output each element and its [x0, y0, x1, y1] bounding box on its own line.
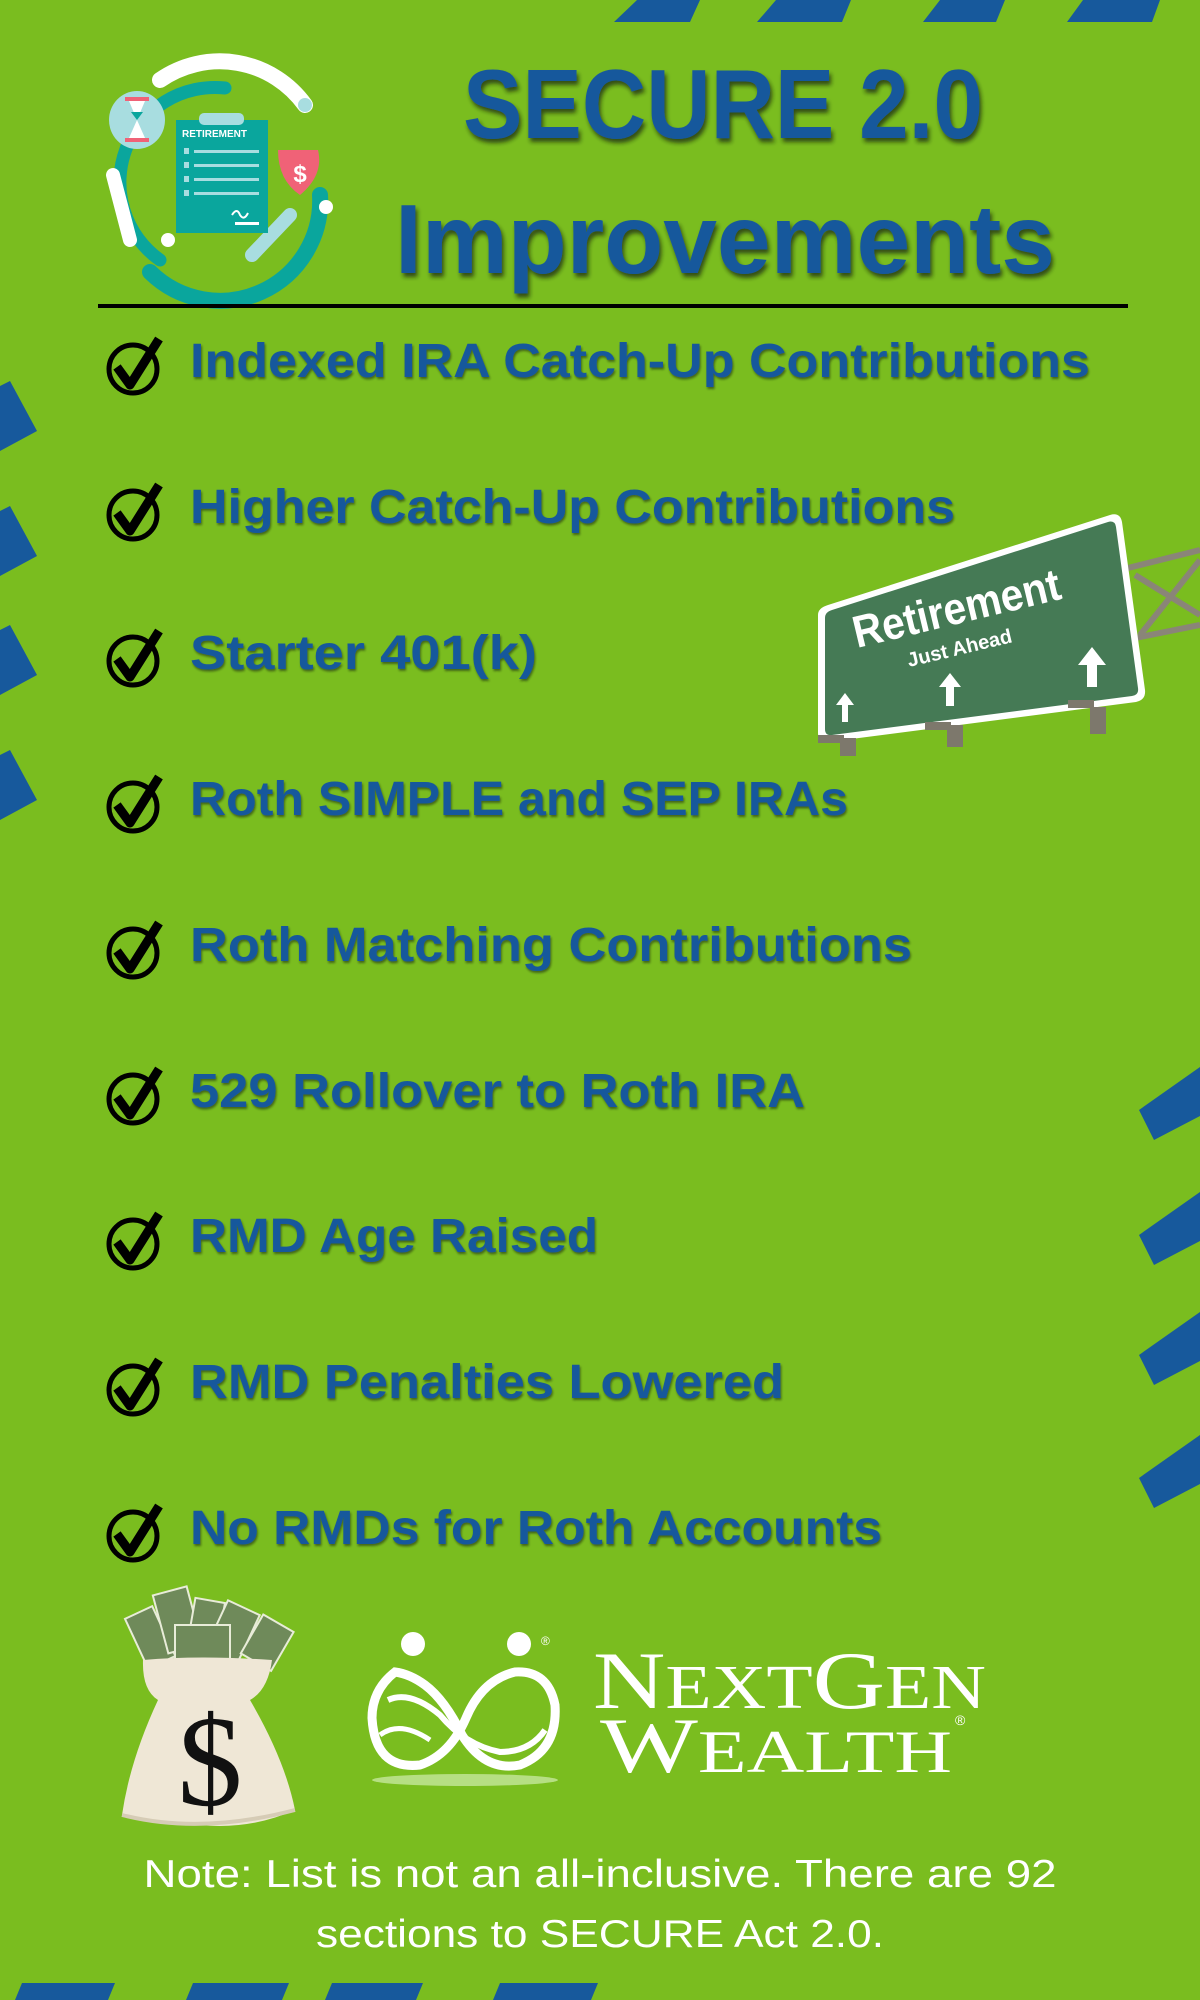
- item 8: RMD Penalties Lowered: [190, 1356, 784, 1409]
- note text: [144, 1853, 1056, 1956]
- bottom stripes: [15, 1983, 598, 2000]
- item 7: RMD Age Raised: [190, 1210, 598, 1263]
- note text: sections to SECURE Act 2.0.: [316, 1913, 884, 1956]
- logo symbol: ®: [541, 1634, 550, 1648]
- road sign: Retirement Just Ahead: Retirement: [847, 559, 1065, 658]
- right stripes: [1139, 1067, 1200, 1508]
- logo symbol: [372, 1632, 558, 1786]
- left stripes: [0, 381, 37, 820]
- icon: retirement clipboard: RETIREMENT: [182, 129, 247, 140]
- item 4: Roth SIMPLE and SEP IRAs: [190, 773, 848, 826]
- logo: NextGen Wealth: [372, 1632, 986, 1789]
- logo: NextGen Wealth: W EALTH: [600, 1702, 952, 1789]
- item 5: Roth Matching Contributions: [190, 919, 912, 972]
- top stripes: [614, 0, 1160, 22]
- money bag: $: [178, 1690, 242, 1834]
- item 2: Higher Catch-Up Contributions: [190, 481, 955, 534]
- title: Improvements: [395, 184, 1055, 294]
- logo: NextGen Wealth: NEXT GEN: [593, 1635, 986, 1726]
- icon: retirement clipboard: [109, 61, 333, 301]
- road sign: Retirement Just Ahead: [818, 514, 1200, 756]
- list: improvements: [109, 335, 1090, 1560]
- note text: Note: List is not an all-inclusive. There are 92: [144, 1853, 1056, 1896]
- item 9: No RMDs for Roth Accounts: [190, 1502, 882, 1555]
- title: [395, 49, 1055, 294]
- item 1: Indexed IRA Catch-Up Contributions: [190, 335, 1090, 388]
- logo: NextGen Wealth: ®: [955, 1712, 966, 1728]
- item 3: [109, 627, 537, 685]
- title: SECURE 2.0: [463, 49, 983, 159]
- item 3: Starter 401(k): [190, 627, 537, 680]
- item 6: 529 Rollover to Roth IRA: [190, 1065, 805, 1118]
- icon: retirement clipboard: $: [293, 161, 307, 188]
- money bag: [122, 1586, 295, 1834]
- road sign: Retirement Just Ahead: Just Ahead: [905, 625, 1014, 672]
